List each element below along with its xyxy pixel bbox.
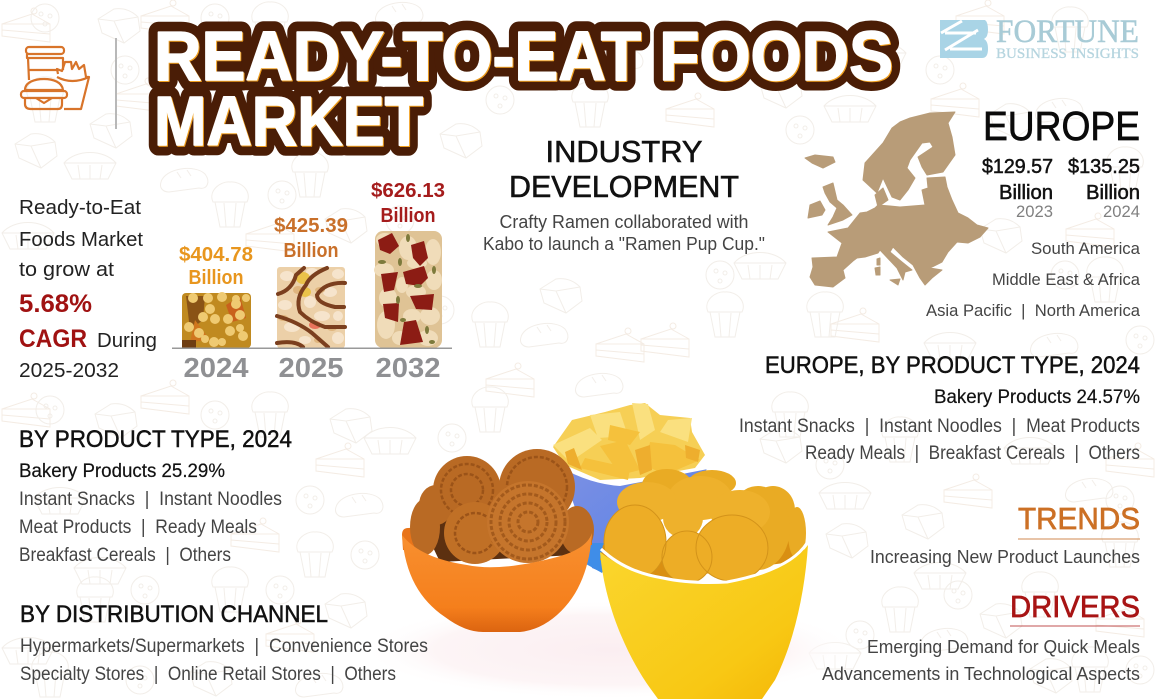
panel: trends: Increasing New Product Launches <box>870 547 1140 567</box>
text: CAGR statement: to grow at <box>19 259 114 281</box>
panel: drivers <box>822 589 1140 684</box>
year labels: 2032 <box>376 352 440 383</box>
text: industry development: DEVELOPMENT <box>509 169 739 204</box>
panel: Europe by product type <box>739 352 1140 464</box>
text: industry development: Crafty Ramen collaborated with <box>500 212 748 232</box>
logo: Fortune Business Insights: FORTUNE <box>996 14 1139 50</box>
bar 2032 <box>374 231 442 348</box>
panel: Europe figures: Middle East & Africa <box>992 270 1141 289</box>
value labels: $626.13 <box>371 180 445 202</box>
text: CAGR statement: Ready-to-Eat <box>19 197 141 219</box>
text: CAGR statement <box>19 197 157 382</box>
panel: drivers: Advancements in Technological Aspects <box>822 664 1140 684</box>
panel: Europe figures: $129.57 <box>982 156 1053 178</box>
title: READY-TO-EAT FOODS <box>154 17 893 95</box>
text: CAGR statement: 2025-2032 <box>19 360 119 382</box>
panel: Europe figures: Billion <box>1086 182 1140 204</box>
panel: Europe figures <box>926 103 1141 320</box>
value labels: $404.78 <box>179 244 253 266</box>
title: MARKET <box>154 82 423 160</box>
title: READY-TO-EAT FOODS <box>154 17 893 95</box>
panel: by distribution channel: Hypermarkets/Supermarkets | Convenience Stores <box>20 636 428 657</box>
panel: Europe figures: $135.25 <box>1068 156 1140 178</box>
panel: Europe figures: Billion <box>999 182 1053 204</box>
axis <box>172 348 452 349</box>
icon: fast food <box>21 47 89 109</box>
title: MARKET <box>155 83 424 161</box>
table shadow behind bowls <box>360 600 860 700</box>
blue bowl with chips <box>553 403 708 573</box>
panel: Europe by product type: Instant Snacks | Instant Noodles | Meat Products <box>739 416 1140 437</box>
text: CAGR statement: 5.68% <box>19 290 92 318</box>
text: CAGR statement: During <box>97 330 157 352</box>
photo: bowls of snacks <box>402 403 808 699</box>
title: READY-TO-EAT FOODS <box>155 18 894 96</box>
panel: Europe figures: South America <box>1031 239 1141 258</box>
value labels: $425.39 <box>274 215 348 237</box>
panel: Europe figures: EUROPE <box>983 103 1140 149</box>
panel: Europe figures: Asia Pacific | North America <box>926 301 1141 320</box>
panel: by product type: Instant Snacks | Instant Noodles <box>19 489 282 510</box>
logo: Fortune Business Insights <box>940 14 1139 62</box>
panel: Europe by product type: Bakery Products 24.57% <box>934 387 1140 408</box>
panel: drivers: Emerging Demand for Quick Meals <box>867 637 1140 657</box>
orange bowl with chakli <box>402 449 594 632</box>
panel: trends <box>870 501 1140 567</box>
panel: drivers: DRIVERS <box>1010 589 1140 624</box>
divider <box>115 38 117 129</box>
title: MARKET <box>154 82 423 160</box>
panel: by distribution channel: Specialty Stores | Online Retail Stores | Others <box>20 664 396 685</box>
year labels: 2024 <box>184 352 249 383</box>
panel: by product type: Bakery Products 25.29% <box>19 461 225 482</box>
panel: by product type <box>19 426 292 566</box>
panel: Europe figures: 2023 <box>1016 202 1053 221</box>
bar 2024 <box>182 292 251 348</box>
panel: by product type: BY PRODUCT TYPE, 2024 <box>19 426 292 453</box>
text: CAGR statement: CAGR <box>19 325 87 353</box>
panel: by distribution channel: BY DISTRIBUTION CHANNEL <box>20 601 328 628</box>
text: industry development <box>483 134 765 254</box>
text: industry development: Kabo to launch a "Ramen Pup Cup." <box>483 234 765 254</box>
value labels: Billion <box>188 267 244 289</box>
text: industry development: INDUSTRY <box>546 134 702 169</box>
title <box>154 17 894 161</box>
panel: Europe figures: 2024 <box>1103 202 1140 221</box>
panel: Europe by product type: EUROPE, BY PRODUCT TYPE, 2024 <box>765 352 1140 379</box>
yellow bowl with chips <box>600 469 808 699</box>
logo: Fortune Business Insights: BUSINESS INSIGHTS <box>996 46 1139 62</box>
value labels: Billion <box>380 205 436 227</box>
value labels <box>179 180 445 289</box>
year labels: 2025 <box>278 352 344 383</box>
panel: by product type: Breakfast Cereals | Others <box>19 545 231 566</box>
chart: market size bars <box>172 180 452 383</box>
map: Europe <box>805 112 988 287</box>
panel: by distribution channel <box>20 601 428 685</box>
text: CAGR statement: Foods Market <box>19 229 143 251</box>
bar 2025 <box>277 267 345 348</box>
panel: by product type: Meat Products | Ready Meals <box>19 517 257 538</box>
year labels <box>184 352 440 383</box>
panel: trends: TRENDS <box>1018 501 1140 536</box>
value labels: Billion <box>284 240 338 262</box>
